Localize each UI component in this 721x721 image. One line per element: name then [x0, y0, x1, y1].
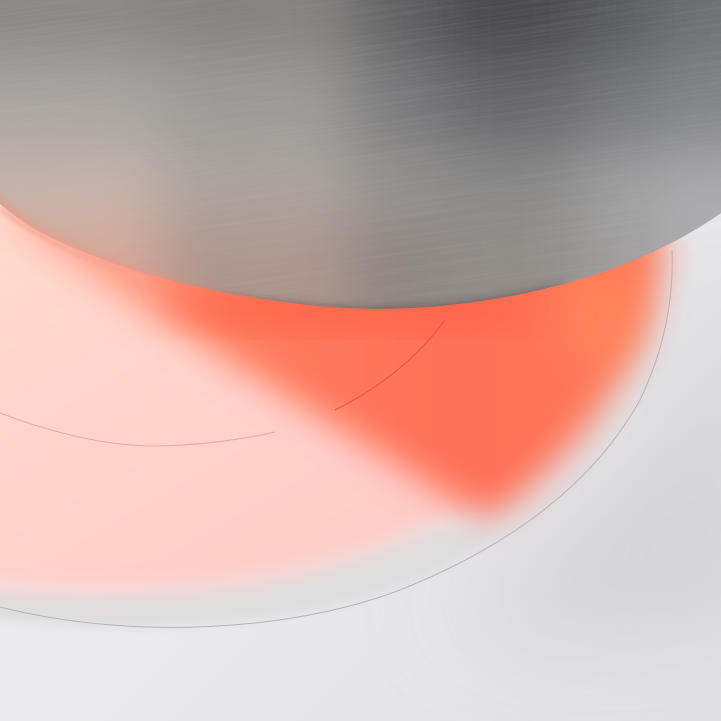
pan — [0, 0, 721, 309]
pan: brushed texture — [426, 0, 585, 36]
glow: saturated red wedge — [0, 205, 665, 520]
pan: red reflection on left rim — [0, 195, 223, 292]
glow: pale pink zone — [0, 200, 620, 593]
grey band below the glow — [0, 530, 500, 626]
pan: dark lower rim — [217, 280, 565, 309]
glow: orange hot spot right — [558, 265, 642, 365]
pan: blurred tone grid — [0, 0, 721, 309]
inner cooking zone ring, left arc — [0, 413, 275, 446]
soft edge over pan left side — [0, 208, 150, 280]
outer cooking zone ring — [0, 250, 672, 627]
glow: hot core below pan — [160, 288, 540, 328]
inner cooking zone ring, right arc — [335, 320, 445, 410]
shadow on hob, lower right — [440, 270, 721, 640]
